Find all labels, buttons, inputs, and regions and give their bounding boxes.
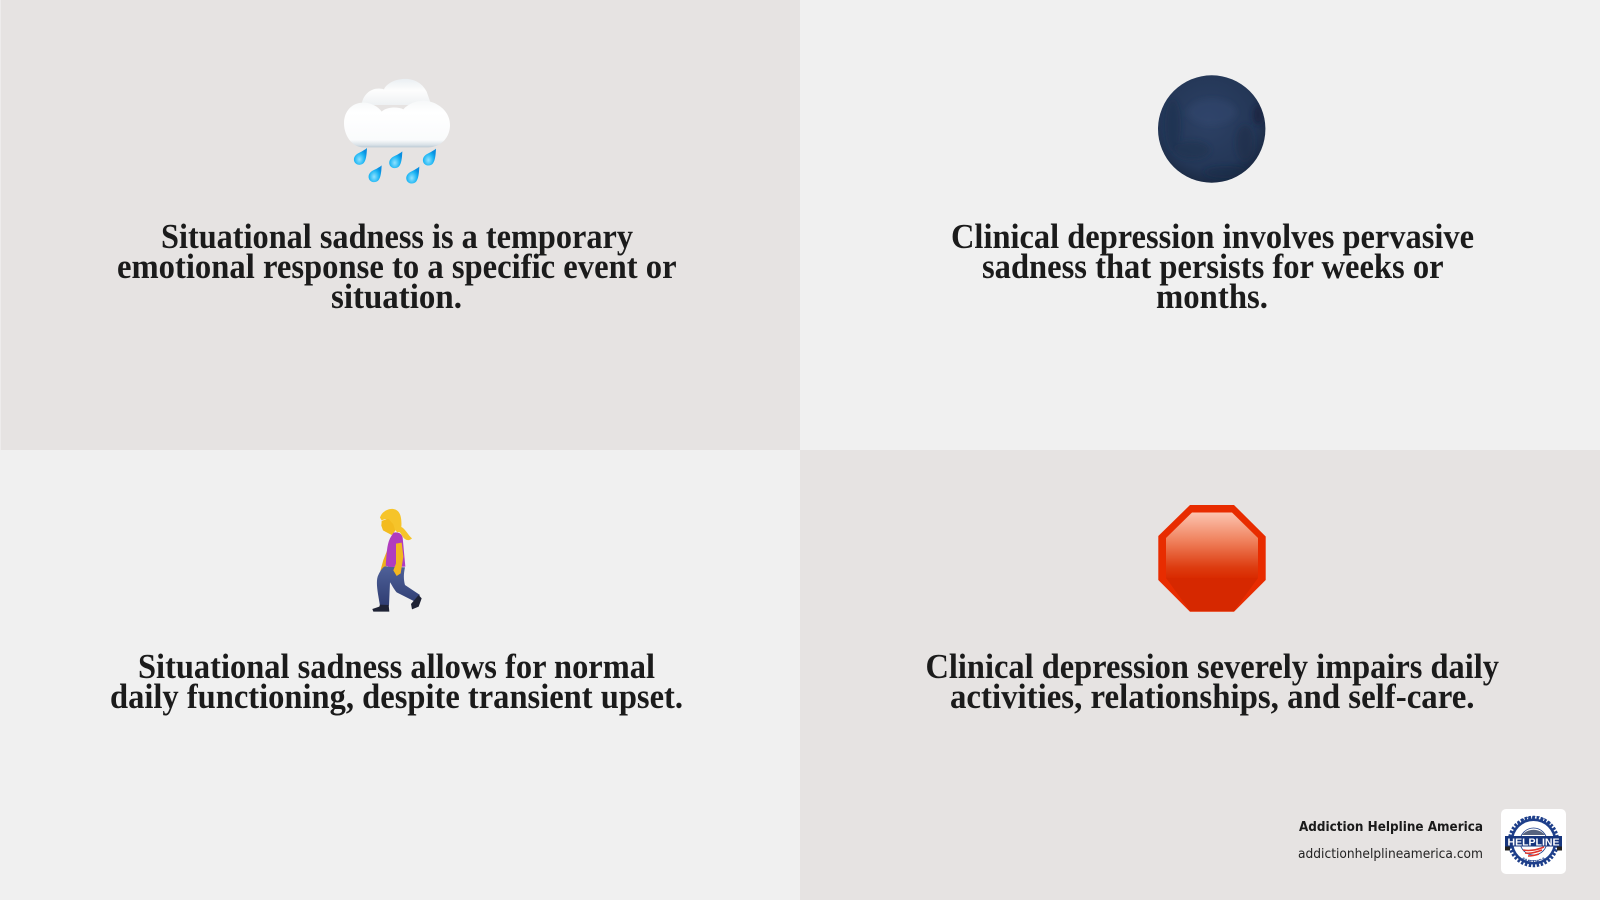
text: situational sadness definition: emotional response to a specific event or	[117, 248, 676, 286]
text: situational sadness definition: Situational sadness is a temporary	[161, 218, 633, 256]
panel: situational sadness, functioning	[0, 450, 800, 900]
panel: clinical depression, impairment	[800, 450, 1600, 900]
panel: situational sadness, temporary	[0, 0, 800, 450]
icon: new moon	[1158, 75, 1265, 183]
logo: helpline badge: ADDICTION	[1517, 816, 1551, 825]
icon: stop sign	[1158, 505, 1266, 612]
logo: helpline badge: HELPLINE	[1508, 836, 1560, 848]
text: situational sadness functioning: Situational sadness allows for normal	[138, 648, 655, 686]
text: situational sadness functioning: daily functioning, despite transient upset.	[110, 678, 683, 716]
text: clinical depression impairment: Clinical depression severely impairs daily	[926, 648, 1499, 686]
logo: helpline badge	[1501, 809, 1566, 874]
text: clinical depression definition: sadness that persists for weeks or	[982, 248, 1443, 286]
brand name: Addiction Helpline America	[1299, 820, 1483, 835]
text: clinical depression definition: Clinical depression involves pervasive	[951, 218, 1474, 256]
brand url: addictionhelplineamerica.com	[1298, 847, 1483, 862]
logo: helpline badge: AMERICA	[1522, 857, 1545, 864]
icon: cloud with rain	[344, 79, 450, 183]
panel: clinical depression, persistent	[952, 75, 1474, 308]
text: clinical depression definition: months.	[1156, 278, 1268, 316]
text: situational sadness definition: situation.	[331, 278, 462, 316]
text: clinical depression impairment: activities, relationships, and self-care.	[950, 678, 1474, 716]
icon: woman walking	[372, 509, 422, 612]
